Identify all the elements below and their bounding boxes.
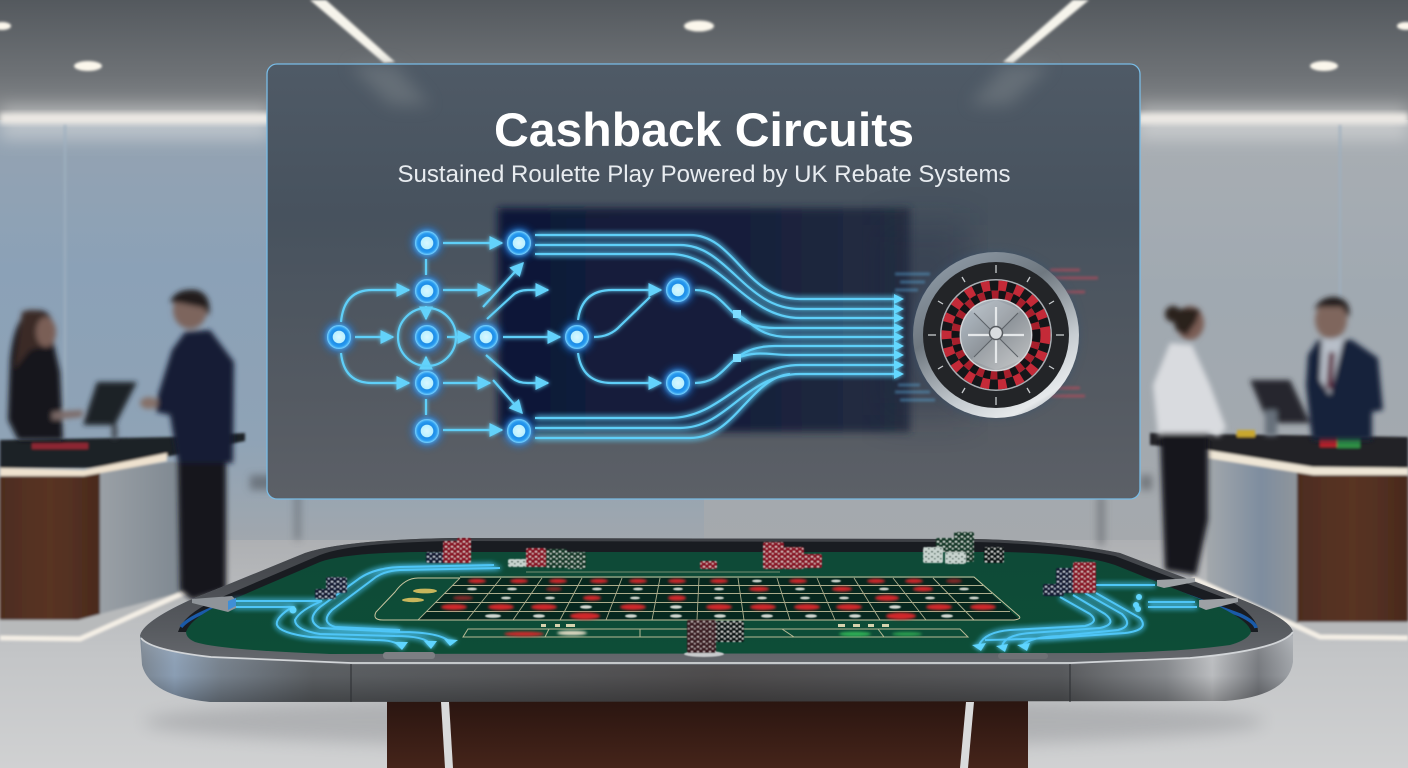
zero area outline (375, 577, 1020, 620)
turret hub (990, 326, 1002, 340)
rim clips and pads (192, 578, 1238, 659)
desk base (0, 590, 190, 636)
rim top surface (140, 538, 1293, 665)
chip stacks (315, 532, 1096, 657)
zero markers (402, 589, 437, 602)
number ring red pockets (946, 286, 1046, 384)
wheel metal bezel (940, 279, 1052, 391)
outside bet ovals (504, 631, 922, 636)
background chair shapes (250, 475, 1152, 545)
wheel glow (912, 251, 1080, 419)
desk LED strip (0, 453, 167, 476)
desk side panel (100, 462, 192, 625)
woman at left (8, 310, 83, 440)
betting layout (375, 572, 1020, 637)
inner pocket ring black (956, 294, 1036, 376)
chips right top (923, 532, 1004, 564)
arrowheads into wheel (894, 294, 904, 379)
inner pocket ring dark (956, 294, 1036, 376)
chips right side (1043, 562, 1096, 596)
circuit diagram (324, 228, 904, 446)
wall light glow (0, 105, 1408, 140)
outer metal ring (913, 252, 1079, 418)
dark screen behind diagram (498, 208, 910, 432)
wall light strip right (1138, 113, 1408, 124)
desk top (0, 433, 245, 468)
floor light line (1192, 578, 1408, 638)
table floor shadow (144, 696, 1264, 748)
right wall (704, 120, 1408, 545)
outside bets row (463, 629, 968, 637)
table rim body (140, 538, 1293, 702)
ceiling (0, 0, 1408, 125)
desk wood front (1297, 472, 1408, 623)
white number marks (467, 580, 979, 618)
track ticks (928, 265, 1064, 405)
chips far left (426, 538, 471, 563)
panel glass (267, 64, 1140, 499)
node halos (324, 228, 693, 446)
desk wood front (0, 472, 100, 622)
number grid background (418, 578, 1020, 620)
left wall (0, 120, 704, 545)
counter chips (1237, 430, 1360, 448)
glass panel (267, 64, 1140, 499)
cone facets (971, 300, 1021, 370)
number ring black (946, 286, 1046, 384)
man at right (1306, 297, 1383, 440)
right neon arrow tips (972, 594, 1142, 652)
left network arrows (341, 243, 560, 430)
subtitle: Sustained Roulette Play Powered by UK Rebate Systems (398, 161, 1010, 188)
desk LED strip (1207, 450, 1408, 475)
man at left (140, 290, 234, 600)
title: Cashback Circuits (494, 103, 914, 156)
grid lines (418, 578, 1010, 620)
label row marks (541, 624, 889, 627)
left people (8, 290, 234, 600)
roulette wheel (912, 251, 1080, 419)
woman at right (1153, 306, 1226, 575)
motion streaks blue (895, 274, 935, 400)
roulette table (140, 532, 1293, 768)
ceiling spots (0, 20, 1408, 71)
inner dark lip (178, 541, 1258, 632)
merge junctions (733, 310, 741, 362)
chips center (700, 542, 822, 569)
chips mid left (508, 548, 586, 569)
right people (1153, 297, 1383, 575)
floor light line (0, 590, 190, 639)
desk top (1150, 433, 1408, 468)
counter items (32, 443, 88, 449)
ceiling reflection glow (350, 65, 430, 105)
rim seams (351, 664, 1070, 702)
ceiling strip light left (310, 0, 395, 63)
turret spokes (968, 307, 1024, 363)
right neon circuit (979, 585, 1197, 646)
floor (0, 540, 1408, 768)
desk base (1297, 622, 1408, 636)
chips front center (684, 620, 744, 657)
wall seams (65, 125, 1340, 440)
middle branch arrows (578, 290, 661, 383)
silver cone (960, 300, 1032, 370)
table base (387, 700, 1028, 768)
left reception desk (0, 433, 245, 639)
blue lip glow (181, 585, 1256, 628)
ceiling strip light right (1003, 0, 1089, 63)
monitor left (83, 382, 137, 439)
top border line (526, 571, 780, 573)
table front shading (142, 636, 1293, 702)
network nodes (327, 231, 690, 443)
dark track (923, 262, 1069, 408)
monitor right (1250, 380, 1310, 436)
right dark falloff (880, 225, 970, 415)
left neon arrow tips (290, 606, 458, 650)
panel border (267, 64, 1140, 499)
chips left side (315, 577, 347, 599)
left neon circuit (233, 565, 500, 646)
bundled flow lines (535, 235, 897, 438)
red number ovals (441, 579, 996, 620)
motion streaks red (1050, 270, 1098, 396)
felt (186, 552, 1251, 654)
rim bright edge (141, 632, 1293, 663)
right reception desk (1150, 430, 1408, 638)
wall light strip left (0, 113, 270, 124)
desk side panel (1207, 455, 1297, 625)
